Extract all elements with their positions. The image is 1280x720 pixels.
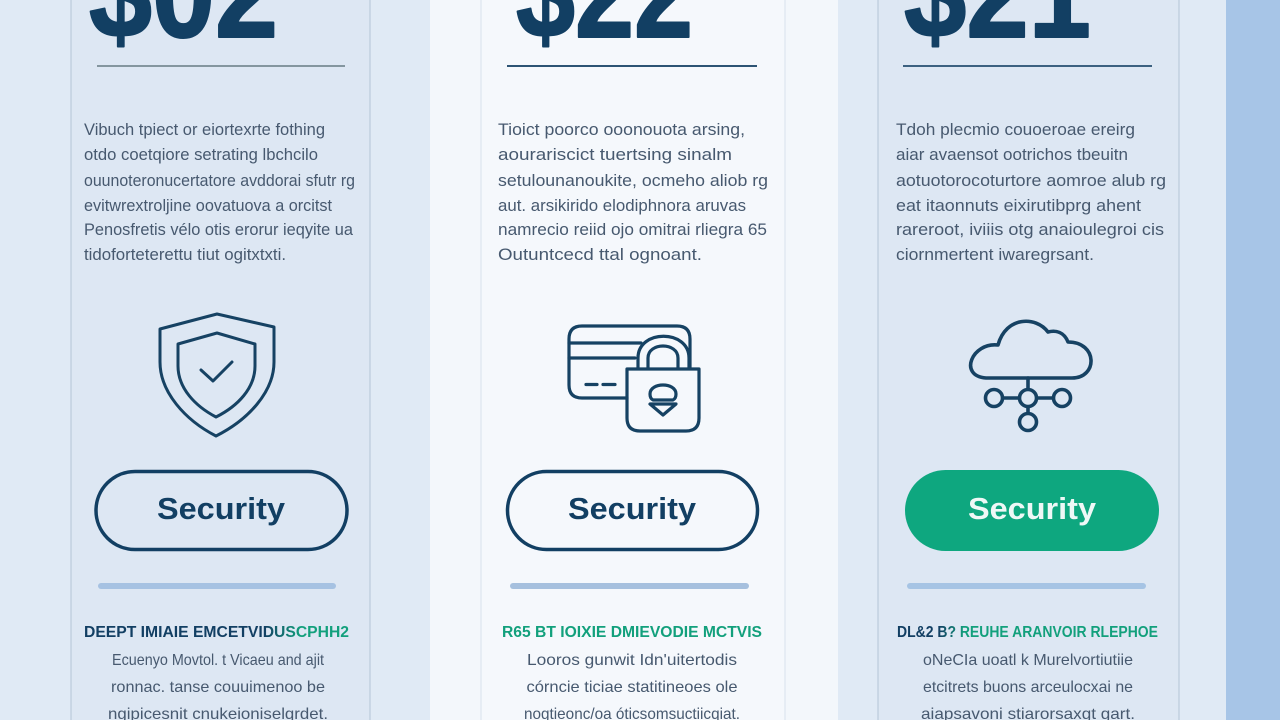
description text xyxy=(84,120,355,264)
subheading: R65 BT IOIXIE DMIEVODIE MCTVIS xyxy=(502,624,762,641)
caption text: etcitrets buons arceulocxai ne xyxy=(923,679,1133,696)
panel: left column xyxy=(71,0,370,720)
description text: namrecio reiid ojo omitrai rliegra 65 xyxy=(498,220,767,239)
description text: eat itaonnuts eixirutibprg ahent xyxy=(896,196,1141,215)
caption text xyxy=(921,652,1135,720)
description text: evitwrextroljine oovatuova a orcitst xyxy=(84,196,332,215)
button: security outline: Security xyxy=(568,491,697,526)
description text: tidoforteterettu tiut ogitxtxti. xyxy=(84,245,286,264)
panel: centre column xyxy=(481,0,785,720)
price rule xyxy=(507,65,757,67)
card background xyxy=(878,0,1179,720)
caption text: ronnac. tanse couuimenoo be xyxy=(111,679,325,696)
icon: cloud network xyxy=(971,321,1091,430)
description text: aourariscict tuertsing sinalm xyxy=(498,145,732,164)
caption text: Looros gunwit Idn'uitertodis xyxy=(527,652,737,669)
card background xyxy=(481,0,785,720)
description text: Penosfretis vélo otis erorur ieqyite ua xyxy=(84,220,354,239)
subheading: DL&2 B? REUHE ARANVOIR RLEPHOE xyxy=(897,624,1158,641)
description text: Outuntcecd ttal ognoant. xyxy=(498,245,702,264)
description text: aut. arsikirido elodiphnora aruvas xyxy=(498,196,746,215)
lower rule xyxy=(510,583,749,589)
icon: credit card with padlock xyxy=(569,326,699,431)
caption text xyxy=(108,652,328,720)
description text: rareroot, iviiis otg anaioulegroi cis xyxy=(896,220,1164,239)
button: security outline xyxy=(96,472,347,550)
description text: setulounanoukite, ocmeho aliob rg xyxy=(498,171,768,190)
price rule xyxy=(97,65,345,67)
icon: shield with check xyxy=(160,314,274,436)
caption text xyxy=(524,652,740,720)
price rule xyxy=(903,65,1152,67)
description text: Vibuch tpiect or eiortexrte fothing xyxy=(84,120,325,139)
description text: Tdoh plecmio couoeroae ereirg xyxy=(896,120,1135,139)
subheading: DEEPT IMIAIE EMCETVIDUSCPHH2 xyxy=(84,624,349,641)
lower rule xyxy=(98,583,336,589)
panel: right column xyxy=(878,0,1179,720)
button: security filled xyxy=(905,470,1159,551)
description text: otdo coetqiore setrating lbchcilo xyxy=(84,145,318,164)
caption text: córncie ticiae statitineoes ole xyxy=(526,679,738,696)
lower rule xyxy=(907,583,1146,589)
description text: ouunoteronucertatore avddorai sfutr rg xyxy=(84,171,355,190)
button: security outline xyxy=(508,472,758,550)
description text: aiar avaensot ootrichos tbeuitn xyxy=(896,145,1128,164)
button: security filled: Security xyxy=(968,491,1097,526)
description text xyxy=(896,120,1166,264)
card background xyxy=(71,0,370,720)
description text: aotuotorocoturtore aomroe alub rg xyxy=(896,171,1166,190)
description text: Tioict poorco ooonouota arsing, xyxy=(498,120,745,139)
description text xyxy=(498,120,768,264)
caption text: Ecuenyo Movtol. t Vicaeu and ajit xyxy=(112,652,324,669)
button: security outline: Security xyxy=(157,491,286,526)
caption text: oNeCIa uoatl k Murelvortiutiie xyxy=(923,652,1133,669)
description text: ciornmertent iwaregrsant. xyxy=(896,245,1094,264)
